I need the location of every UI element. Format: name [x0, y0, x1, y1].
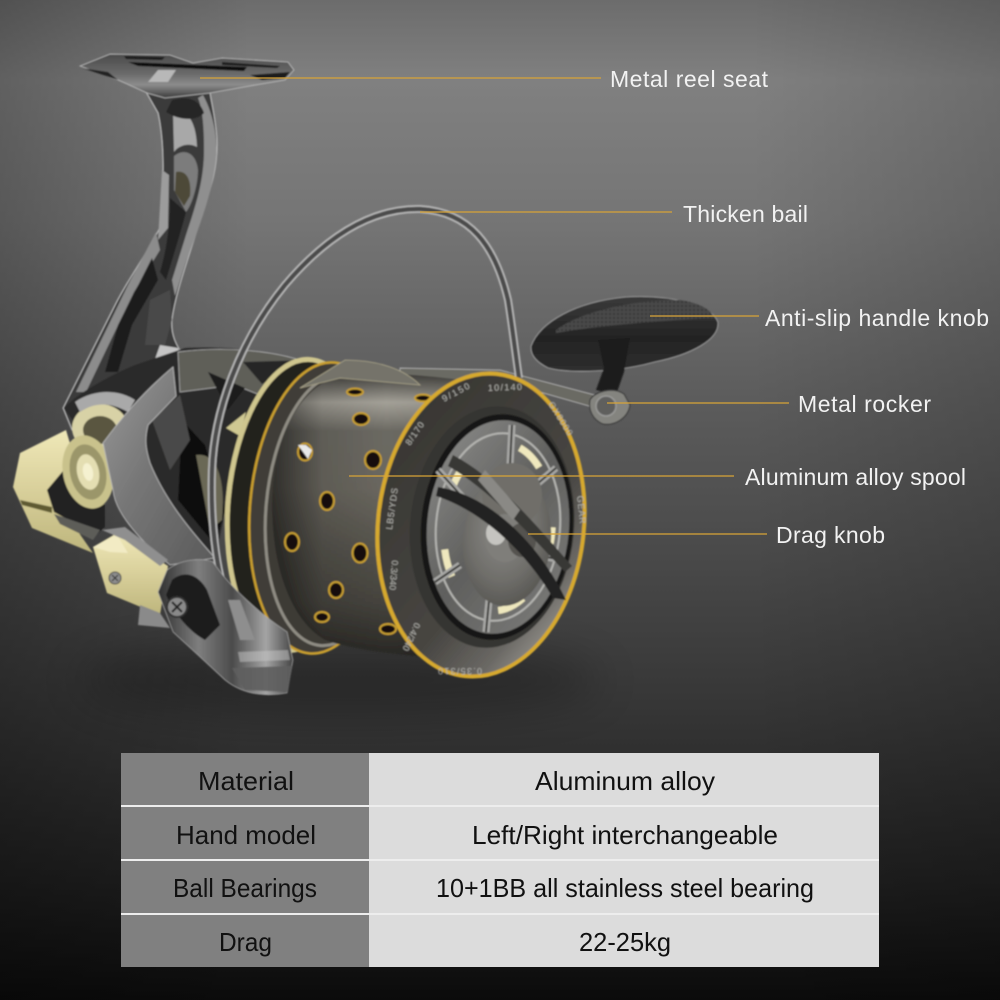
spool barrel — [272, 360, 500, 660]
bail support arms over spool — [436, 455, 572, 600]
row: drag — [219, 927, 671, 957]
reel body lower gold housing — [93, 533, 170, 628]
reel body rear gold housing — [13, 430, 105, 553]
row: material: Aluminum alloy — [535, 766, 715, 796]
spool line capacity text: 0.4/240 — [401, 621, 422, 653]
row: hand model: Hand model — [176, 820, 316, 850]
spool holes — [285, 388, 431, 634]
spool line capacity text: GEAR — [575, 495, 588, 525]
spool line capacity text: 0.3/340 — [387, 560, 400, 591]
row: ball bearings: 10+1BB all stainless steel bearing — [436, 873, 814, 903]
anti-slip handle knob — [531, 297, 718, 395]
drag knob — [485, 514, 536, 562]
drive side gold cap — [56, 431, 120, 513]
spool line capacity text: LB5/YDS — [384, 487, 400, 530]
spool line capacity text: 9/150 — [440, 381, 471, 404]
row: drag: Drag — [219, 927, 272, 957]
row: material — [198, 766, 715, 796]
rotor interior — [64, 347, 330, 560]
bail arm — [158, 560, 293, 695]
row: ball bearings: Ball Bearings — [173, 873, 317, 903]
callout: drag knob: Drag knob — [776, 522, 885, 548]
reel shadow — [80, 645, 600, 715]
metal rocker — [590, 390, 630, 424]
spool line capacity text: GX8000 — [546, 400, 575, 437]
spool line capacity text: 0.35/310 — [438, 666, 482, 676]
callout: anti-slip handle knob: Anti-slip handle knob — [765, 305, 989, 331]
icon: side screw — [109, 572, 121, 584]
row: hand model: Left/Right interchangeable — [472, 820, 778, 850]
thicken bail wire — [212, 209, 519, 615]
icon: bail screw — [167, 597, 187, 617]
spool front flange — [363, 363, 599, 687]
illustration: spinning fishing reel — [13, 54, 718, 695]
spool rear gold ring — [216, 353, 380, 657]
rocker arm rear support — [400, 368, 595, 407]
row: material: Material — [198, 766, 294, 796]
metal reel seat — [80, 54, 294, 98]
row: ball bearings — [173, 873, 814, 903]
spool line capacity text: 10/140 — [488, 382, 522, 393]
spool line capacity text: 8/170 — [403, 420, 426, 447]
spool rear flange — [238, 356, 410, 660]
callout: metal reel seat: Metal reel seat — [610, 66, 769, 92]
row: hand model — [176, 820, 778, 850]
specification table — [121, 753, 879, 967]
callout: metal rocker: Metal rocker — [798, 391, 931, 417]
rotor arm — [102, 367, 215, 566]
reel stem — [63, 92, 217, 430]
callout: thicken bail: Thicken bail — [683, 201, 808, 227]
row: drag: 22-25kg — [579, 927, 671, 957]
gold gear bearing ring — [72, 392, 135, 452]
spool line capacity text — [384, 381, 588, 676]
spool front wheel — [411, 408, 583, 646]
callout: aluminum alloy spool: Aluminum alloy spool — [745, 464, 966, 490]
